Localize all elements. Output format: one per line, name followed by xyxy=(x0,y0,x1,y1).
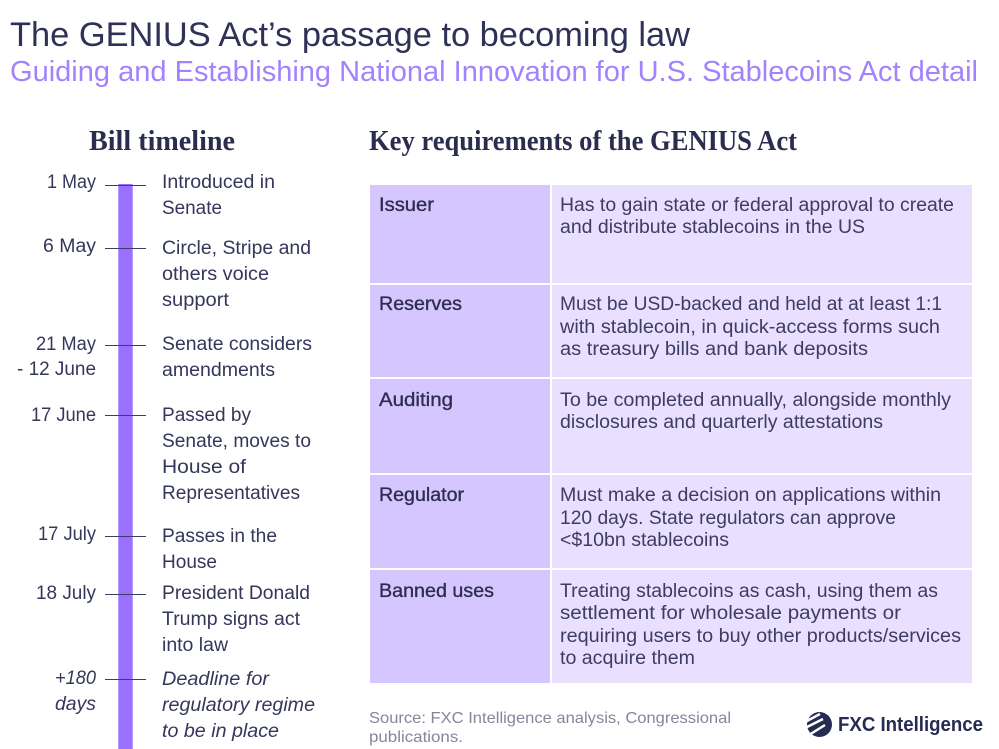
event: 21 May - 12 June xyxy=(17,334,312,381)
logo: FXC Intelligence xyxy=(805,712,983,737)
panel: requirements table xyxy=(370,185,972,683)
row: issuer: Has to gain state or federal approval to create xyxy=(560,195,954,216)
event: 17 June: Senate, moves to xyxy=(162,431,311,452)
row: regulator: 120 days. State regulators can approve xyxy=(560,508,896,529)
event: 1 May: Senate xyxy=(162,198,222,219)
event: +180 days: to be in place xyxy=(162,721,279,742)
event: 6 May: 6 May xyxy=(43,236,97,257)
event: 6 May: support xyxy=(162,290,230,311)
timeline bar xyxy=(118,184,133,749)
event: 17 July xyxy=(38,524,277,573)
event: 18 July: 18 July xyxy=(36,583,96,604)
event: 18 July: President Donald xyxy=(162,583,310,604)
row: banned uses: Banned uses xyxy=(379,581,494,602)
event: 17 July: House xyxy=(162,552,217,573)
row: regulator: <$10bn stablecoins xyxy=(560,530,729,551)
event: 21 May - 12 June: 21 May xyxy=(36,334,96,355)
event: 17 July: Passes in the xyxy=(162,526,277,547)
event: 21 May - 12 June: Senate considers xyxy=(162,334,312,355)
row: issuer xyxy=(370,185,972,283)
event: 1 May xyxy=(47,172,275,219)
event: 18 July xyxy=(36,583,310,656)
event: 21 May - 12 June: - 12 June xyxy=(17,359,96,380)
logo: FXC Intelligence: FXC Intelligence xyxy=(838,714,983,736)
row: banned uses: to acquire them xyxy=(560,648,695,669)
row: auditing xyxy=(370,379,972,473)
subtitle: Guiding and Establishing National Innovation for U.S. Stablecoins Act detail xyxy=(10,56,978,88)
event: 17 June: Passed by xyxy=(162,405,251,426)
event: 17 June xyxy=(31,405,311,504)
row: banned uses: settlement for wholesale payments or xyxy=(560,603,902,624)
row: reserves: Must be USD-backed and held at at least 1:1 xyxy=(560,294,942,315)
row: regulator: Regulator xyxy=(379,485,465,506)
source note xyxy=(369,710,731,746)
event: 6 May: others voice xyxy=(162,264,269,285)
event: +180 days: regulatory regime xyxy=(162,695,315,716)
event: 17 June: Representatives xyxy=(162,483,300,504)
event: 1 May: Introduced in xyxy=(162,172,275,193)
event: 18 July: Trump signs act xyxy=(162,609,301,630)
event: 17 June: 17 June xyxy=(31,405,96,426)
row: regulator: Must make a decision on applications within xyxy=(560,485,941,506)
title: The GENIUS Act’s passage to becoming law xyxy=(10,16,690,54)
row: issuer: Issuer xyxy=(379,195,435,216)
heading: bill timeline: Bill timeline xyxy=(89,126,235,157)
row: banned uses: requiring users to buy other products/services xyxy=(560,626,961,647)
row: banned uses: Treating stablecoins as cash, using them as xyxy=(560,581,938,602)
row: reserves: with stablecoin, in quick-access forms such xyxy=(559,317,940,338)
row: auditing: To be completed annually, alongside monthly xyxy=(560,390,952,411)
row: reserves xyxy=(370,285,972,377)
event: 1 May: 1 May xyxy=(47,172,96,193)
panel: bill timeline xyxy=(17,172,315,749)
event: 6 May: Circle, Stripe and xyxy=(162,238,311,259)
event: 17 June: House of xyxy=(162,457,247,478)
row: banned uses xyxy=(370,570,972,683)
row: issuer: and distribute stablecoins in the US xyxy=(560,217,865,238)
event: +180 days: Deadline for xyxy=(162,669,270,690)
row: reserves: Reserves xyxy=(379,294,462,315)
event: 21 May - 12 June: amendments xyxy=(162,360,275,381)
event: 6 May xyxy=(43,236,311,311)
row: reserves: as treasury bills and bank deposits xyxy=(560,339,868,360)
event: 17 July: 17 July xyxy=(38,524,96,545)
event: +180 days xyxy=(55,668,315,742)
row: auditing: disclosures and quarterly attestations xyxy=(560,412,883,433)
heading: key requirements: Key requirements of the GENIUS Act xyxy=(369,126,798,157)
icon: striped globe xyxy=(805,712,832,737)
source note: Source: FXC Intelligence analysis, Congressional xyxy=(369,710,731,727)
source note: publications. xyxy=(369,729,463,746)
event: 18 July: into law xyxy=(162,635,228,656)
row: regulator xyxy=(370,475,972,568)
event: +180 days: +180 xyxy=(55,668,96,689)
row: auditing: Auditing xyxy=(379,390,453,411)
event: +180 days: days xyxy=(55,694,97,715)
